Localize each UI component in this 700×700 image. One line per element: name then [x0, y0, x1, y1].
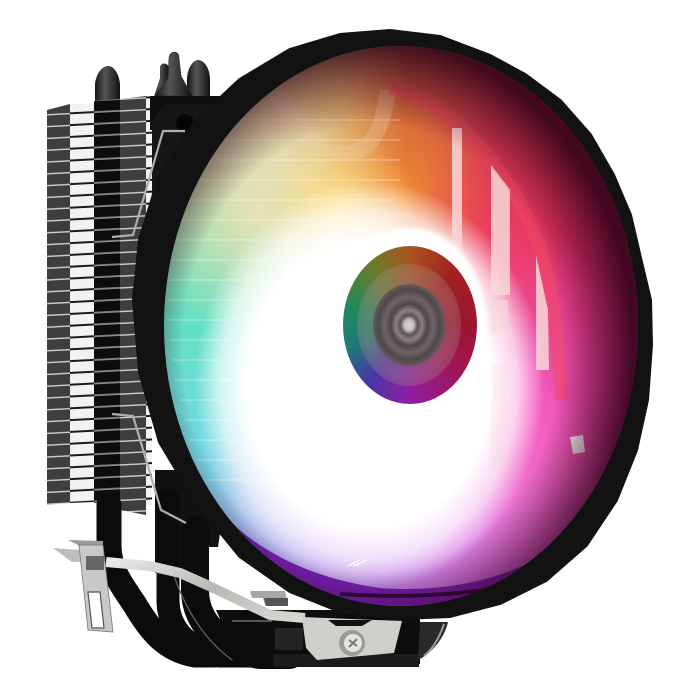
fan hub with rainbow ring [343, 246, 477, 404]
red inner arc [390, 87, 562, 400]
steel clip plate [53, 540, 113, 632]
CPU base block [216, 610, 448, 667]
purple bottom crescent [164, 515, 640, 610]
dark crescent line [340, 582, 525, 596]
steel base bracket and screw [302, 617, 402, 660]
reflection marks [348, 560, 367, 566]
hub soft grey band [357, 264, 461, 386]
heat pipe caps [95, 52, 210, 104]
lit gradient glow [164, 46, 638, 606]
hub concentric rings [373, 284, 445, 366]
grille strips at right [452, 128, 549, 470]
small retention tab [250, 591, 288, 606]
fins seen through fan [168, 80, 585, 606]
white reflection patch [570, 435, 585, 454]
steel mounting arm [106, 562, 305, 618]
white halo around hub [335, 228, 486, 410]
translucent curved tube [275, 90, 388, 154]
fan mounting bracket [152, 104, 222, 573]
heatsink fin stack [47, 96, 220, 515]
dark inner rim shading [164, 46, 638, 606]
fan rainbow light disc [164, 46, 638, 606]
lower heat pipes [109, 500, 290, 660]
